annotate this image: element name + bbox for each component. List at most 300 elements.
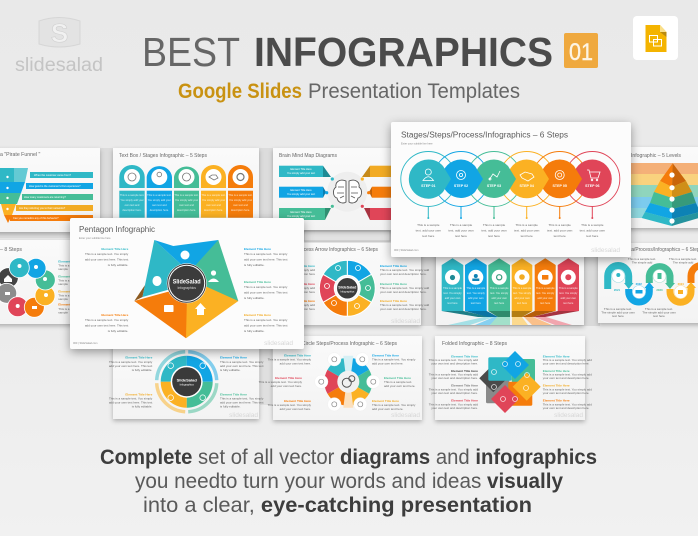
- center label: [177, 378, 197, 386]
- right text: is fully editable.: [244, 296, 265, 300]
- column text: This is a sample text.: [228, 193, 253, 197]
- pentagon center: [167, 263, 207, 303]
- right text: Element Title Here: [244, 280, 271, 284]
- column text: text here: [563, 301, 574, 305]
- heading: Stages/Steps/Process/Infographics – 6 Steps: [401, 130, 568, 140]
- right text: This is a sample text. You simply add: [380, 268, 430, 272]
- brand: slidesalad: [591, 247, 620, 254]
- step text: This is a sample: [549, 223, 571, 227]
- logo: slidesalad: [15, 18, 103, 76]
- column text: own text and: [179, 203, 194, 207]
- column text: You simply add your: [202, 198, 225, 202]
- left text: Element Title Here: [125, 356, 153, 360]
- column: yellow: [201, 165, 226, 218]
- column: green: [488, 258, 510, 311]
- step text: text here: [521, 234, 533, 238]
- step text: This is a sample: [483, 223, 505, 227]
- right text: Element Title Here: [380, 299, 407, 303]
- column text: add your own: [561, 296, 577, 300]
- step text: text here: [586, 234, 599, 238]
- right text: your own text and description here.: [543, 391, 590, 395]
- left text: This is a sample text. You simply: [259, 380, 302, 384]
- column text: own text and: [125, 203, 140, 207]
- snake text: text here: [612, 314, 624, 318]
- left text: Element Title Here: [451, 354, 478, 358]
- left boxes: You simply add your text: [287, 171, 315, 175]
- right text: Element Title Here: [220, 392, 247, 396]
- right text: [244, 247, 288, 333]
- step labels: STEP 02: [454, 184, 468, 188]
- logo: slidesalad: S: [51, 18, 68, 48]
- column text: You simply add your: [148, 198, 171, 202]
- step text: This is a: [58, 307, 70, 311]
- left text: [259, 354, 311, 411]
- step text: text. add your own: [547, 228, 573, 232]
- panel: pyramid slide: [626, 147, 698, 228]
- year labels: [614, 282, 684, 292]
- step icons: [423, 169, 600, 181]
- right text: Element Title Here: [372, 399, 399, 403]
- funnel graphic: [0, 168, 28, 223]
- brand: slidesalad: [554, 412, 583, 419]
- brain circle: [327, 172, 367, 212]
- logo: slidesalad: slidesalad: [15, 55, 103, 76]
- panel: circle quadrant slide: [109, 340, 264, 419]
- right text: your own text and description here.: [543, 362, 590, 366]
- right text: Element Title Here: [372, 354, 399, 358]
- right text: Element Title Here: [380, 264, 407, 268]
- left text: Element Title Here: [275, 376, 302, 380]
- left text: add your own text here.: [271, 384, 302, 388]
- left text: Title Here: [301, 264, 315, 268]
- snake text: The simple add your own: [642, 310, 676, 314]
- subtitle: [178, 80, 520, 103]
- step text: text. add your own: [514, 228, 540, 232]
- connector dots: [325, 177, 370, 208]
- heading: a "Pirate Funnel ": [0, 152, 40, 158]
- column text: This is a sample: [559, 286, 578, 290]
- left text: This is a sample text. You simply: [109, 396, 153, 400]
- center label: Infographics: [180, 382, 194, 386]
- step labels: [421, 184, 599, 188]
- step text: text. add your own: [416, 228, 441, 232]
- column text: You simply add your: [120, 198, 144, 202]
- year labels: 2022: [636, 282, 642, 286]
- right text: This is a sample text. You simply: [244, 285, 288, 289]
- column text: text. You simply: [513, 291, 532, 295]
- subtitle: Presentation Templates: [308, 80, 520, 103]
- column text: own text and: [233, 203, 248, 207]
- column text: You simply add your: [229, 198, 252, 202]
- left text: Element Title Here: [451, 369, 478, 373]
- snake text: The simple add your own: [601, 310, 635, 314]
- step text: sample: [58, 297, 68, 301]
- step text: This is a sample: [516, 223, 538, 227]
- right text: is fully editable.: [244, 263, 265, 267]
- right text: This is a sample text. You simply add: [380, 303, 430, 307]
- right text: add your own text here. This text: [244, 258, 288, 262]
- left text: This is a sample text. You simply: [268, 403, 311, 407]
- main title: BEST: [142, 29, 240, 75]
- left text: Element Title Here: [451, 384, 478, 388]
- left text: Title Here: [301, 282, 315, 286]
- column text: add your own: [468, 296, 484, 300]
- left text: This is a sample text. You simply add: [429, 373, 478, 377]
- step text: text here: [488, 234, 500, 238]
- panel: snake process slide: [598, 243, 698, 323]
- column: blue: [147, 166, 172, 218]
- column text: own text and: [152, 203, 167, 207]
- right text: This is a sample text. You simply add: [543, 402, 592, 406]
- left text: add your own text here. This text: [109, 400, 152, 404]
- column text: add your own: [537, 296, 554, 300]
- right text: add your own text here. This text: [220, 364, 264, 368]
- left boxes: You simply add your text: [287, 192, 315, 196]
- step text: sample: [58, 310, 68, 314]
- left text: This is a sample text. You simply add: [429, 402, 478, 406]
- year labels: 2024: [678, 282, 684, 286]
- step text: This is a sample: [450, 223, 472, 227]
- right text: Element Title Here: [543, 399, 570, 403]
- outer rings: [401, 152, 620, 206]
- snake text: This is a sample text.: [628, 257, 656, 261]
- column text: You simply add your: [175, 198, 198, 202]
- step text: Element T: [58, 259, 73, 263]
- step text: Element T: [58, 289, 73, 293]
- right text: [543, 354, 592, 410]
- step text: text here: [422, 234, 435, 238]
- column text: text. You simply: [559, 291, 578, 295]
- left text: add your own text here. This text: [109, 364, 152, 368]
- column text: own text and: [206, 203, 221, 207]
- column text: description here.: [122, 208, 142, 212]
- step text: This is a: [58, 264, 70, 268]
- badge: 01: 01: [569, 39, 593, 66]
- subtitle: Google Slides: [178, 80, 302, 103]
- brand: slidesalad: [391, 412, 420, 419]
- left text: add your own text here.: [280, 407, 311, 411]
- right text: This is a sample text. You simply add: [380, 286, 430, 290]
- pentagon star: [134, 240, 238, 338]
- right text: This is a sample text. You simply: [244, 318, 288, 322]
- ring icons: [324, 266, 370, 308]
- left text: Element Title Here: [101, 313, 129, 317]
- column text: text here: [447, 301, 458, 305]
- left text: Title Here: [301, 299, 315, 303]
- step labels: STEP 06: [585, 184, 599, 188]
- heading: Infographic – 5 Levels: [631, 153, 681, 159]
- column text: text here: [540, 301, 551, 305]
- left text: This is a sample text. You simply: [109, 360, 153, 364]
- center label: SlideSalad: [177, 378, 197, 382]
- year labels: 2023: [656, 288, 663, 292]
- left text: [429, 354, 478, 410]
- column text: description here.: [231, 208, 250, 212]
- pyramid: [642, 163, 698, 226]
- snake text: This is a sample text.: [604, 307, 632, 311]
- column text: description here.: [150, 208, 169, 212]
- funnel bars: [10, 172, 93, 221]
- right text: Element Title Here: [384, 376, 411, 380]
- right text: Element Title Here: [543, 354, 570, 358]
- left text: You simply add: [295, 286, 315, 290]
- column text: add your own: [514, 296, 530, 300]
- right text: your own text and description here.: [380, 290, 427, 294]
- step text: Element T: [58, 303, 73, 307]
- column: teal: [442, 258, 463, 311]
- left text: [85, 247, 129, 333]
- panel: pirate funnel slide: [0, 148, 100, 232]
- left boxes: Element Title Here: [290, 210, 312, 214]
- left text: Element Title Here: [125, 392, 153, 396]
- panel: stages steps slide: [391, 122, 631, 257]
- column text: text. You simply: [536, 291, 555, 295]
- snake text: This is a sample text.: [669, 257, 697, 261]
- funnel bars: How good is the customer's first experience?: [29, 184, 81, 188]
- right text: is fully editable.: [244, 329, 265, 333]
- left text: description here: [294, 307, 315, 311]
- left text: Element Title Here: [284, 354, 311, 358]
- left text: description here: [294, 272, 315, 276]
- funnel bars: When the customer came from?: [34, 173, 71, 177]
- panel: process arrow slide: [290, 243, 430, 325]
- column text: [120, 193, 253, 212]
- step labels: STEP 03: [487, 184, 501, 188]
- step text: This is a sample: [417, 223, 440, 227]
- step text: [58, 259, 73, 314]
- column text: [443, 286, 578, 305]
- column text: This is a sample: [513, 286, 532, 290]
- right text: Element Title Here: [244, 247, 271, 251]
- step labels: STEP 05: [553, 184, 567, 188]
- left text: [294, 264, 315, 311]
- column text: This is a sample text.: [174, 193, 199, 197]
- panel: 8 steps circle slide: [0, 240, 80, 324]
- left text: add your own text here. This text: [85, 324, 128, 328]
- right text: your own text and description here.: [380, 272, 427, 276]
- left text: [109, 356, 153, 408]
- main title: INFOGRAPHICS: [254, 29, 553, 75]
- right text: This is a sample text. You simply add: [543, 387, 592, 391]
- left text: your own text and description here.: [431, 391, 478, 395]
- column text: add your own: [445, 296, 461, 300]
- snake text: This is a sample text.: [645, 307, 673, 311]
- right text: [372, 354, 416, 411]
- right text: This is a sample text. You simply: [372, 403, 416, 407]
- panel: pentagon infographic slide: [70, 218, 304, 349]
- left boxes: Element Title Here: [290, 188, 312, 192]
- left text: add your own text here.: [280, 362, 311, 366]
- column text: This is a sample: [490, 286, 509, 290]
- brand: slidesalad: [264, 340, 293, 347]
- left text: This is a sample text. You simply add: [429, 387, 478, 391]
- left text: This is a sample text. You simply: [268, 358, 311, 362]
- left text: This is a sample text. You simply: [85, 318, 129, 322]
- right text: This is a sample text. You simply: [244, 252, 288, 256]
- icon: Google Slides: [633, 16, 678, 60]
- column: green: [174, 167, 199, 218]
- column text: This is a sample text.: [147, 193, 172, 197]
- folded diagram: [479, 351, 541, 413]
- left text: your own text and description here.: [431, 406, 478, 410]
- step stems: [427, 207, 593, 219]
- step text: This is a sample: [581, 223, 604, 227]
- column text: description here.: [177, 208, 196, 212]
- column text: This is a sample: [466, 286, 486, 290]
- step text: text here: [554, 234, 566, 238]
- right text: add your own text here.: [384, 384, 416, 388]
- left text: is fully editable.: [132, 404, 152, 408]
- right text: add your own text here. This text: [244, 290, 288, 294]
- column: red: [558, 258, 579, 311]
- step labels: STEP 01: [421, 184, 435, 188]
- right text: add your own text here.: [372, 362, 404, 366]
- snake path: [608, 266, 698, 302]
- step icons: [612, 270, 687, 298]
- right text: [380, 264, 430, 311]
- bottom description: [100, 446, 597, 517]
- right text: Element Title Here: [220, 356, 247, 360]
- right text: This is a sample text. You simply add: [543, 373, 592, 377]
- left text: add your own text here. This text: [85, 258, 128, 262]
- left text: You simply add: [295, 303, 315, 307]
- right text: This is a sample text. You simply: [220, 360, 264, 364]
- column: yellow: [512, 258, 532, 311]
- left text: You simply add: [295, 268, 315, 272]
- circles: [0, 258, 55, 317]
- column text: text. You simply: [490, 291, 509, 295]
- funnel bars: Are they referring you to their networks?: [19, 206, 66, 210]
- step text: text. add your own: [448, 228, 474, 232]
- pentagon center: SlideSalad: [173, 280, 201, 286]
- right text: Element Title Here: [380, 282, 407, 286]
- step text: sample: [58, 282, 68, 286]
- right text: add your own text here.: [372, 407, 404, 411]
- snake text: The simple add: [632, 260, 653, 264]
- right text: your own text and description here.: [380, 307, 427, 311]
- right text: your own text and description here.: [543, 406, 590, 410]
- right text: [220, 356, 264, 408]
- panel: folded infographic slide: [429, 336, 592, 420]
- bottom description: into a clear, eye-catching presentation: [143, 494, 532, 517]
- snake text: [601, 257, 697, 318]
- left text: is fully editable.: [108, 329, 128, 333]
- step text: text here: [455, 234, 467, 238]
- panel: text box stages slide: [113, 148, 259, 228]
- funnel bars: How many customers are returning?: [24, 195, 66, 199]
- bottom description: Complete set of all vector diagrams and infographics: [100, 446, 597, 469]
- column: orange: [228, 165, 253, 218]
- right text: This is a sample text. You simply: [372, 358, 416, 362]
- left text: is fully editable.: [108, 263, 128, 267]
- ring chart: [319, 260, 375, 316]
- step labels: STEP 04: [520, 184, 534, 188]
- heading: Text Box / Stages Infographic – 5 Steps: [119, 153, 207, 159]
- heading: Process Arrow Infographics – 6 Steps: [296, 247, 378, 253]
- heading: Folded Infographic – 8 Steps: [442, 341, 507, 347]
- column text: description here.: [204, 208, 223, 212]
- right text: This is a sample text. You simply: [220, 396, 264, 400]
- column text: text. You simply: [443, 291, 462, 295]
- left text: your own text and description here.: [431, 376, 478, 380]
- step shapes: [409, 159, 612, 199]
- column text: text here: [517, 301, 528, 305]
- right text: is fully editable.: [220, 368, 241, 372]
- right text: Element Title Here: [543, 369, 570, 373]
- heading: Brain Mind Map Diagrams: [279, 153, 337, 159]
- left boxes: You simply add your text: [287, 214, 315, 218]
- subheading: Enter your subtitle line here: [79, 236, 111, 240]
- left text: Element Title Here: [101, 247, 129, 251]
- footer: 000 | SlideSalad.com: [73, 341, 97, 345]
- column text: This is a sample text.: [201, 193, 226, 197]
- column: teal: [119, 165, 145, 218]
- left boxes: Element Title Here: [290, 167, 312, 171]
- pentagon icons: [153, 250, 219, 315]
- radial diagram: [315, 353, 380, 411]
- footer: 000 | SlideSalad.com: [394, 248, 418, 252]
- step text: This is a: [58, 278, 70, 282]
- subheading: Enter your subtitle line here: [401, 142, 433, 146]
- left text: This is a sample text. You simply add: [429, 358, 478, 362]
- left text: This is a sample text. You simply: [85, 252, 129, 256]
- panel: brain mind map slide: [273, 148, 398, 230]
- pentagon center: Infographics: [177, 286, 196, 290]
- fan rays: [442, 311, 579, 325]
- heading: Pentagon Infographic: [79, 225, 155, 234]
- left text: is fully editable.: [132, 368, 152, 372]
- left text: Element Title Here: [284, 399, 311, 403]
- step text: This is a: [58, 294, 70, 298]
- right text: is fully editable.: [220, 404, 241, 408]
- snake text: text here: [653, 314, 665, 318]
- right text: This is a sample text.: [384, 380, 412, 384]
- column text: text here: [494, 301, 505, 305]
- column text: This is a sample text.: [120, 193, 144, 197]
- right boxes: [362, 166, 398, 220]
- right text: your own text and description here.: [543, 376, 590, 380]
- step text: text. add your own: [481, 228, 507, 232]
- left text: Element Title Here: [451, 399, 478, 403]
- ring center label: SlideSalad: [338, 286, 356, 290]
- panel: circle steps slide: [259, 336, 422, 420]
- column text: This is a sample: [443, 286, 462, 290]
- column text: text here: [471, 301, 481, 305]
- heading: – 8 Steps: [0, 247, 22, 253]
- left text: your own text and description here.: [431, 362, 478, 366]
- column text: add your own: [491, 296, 508, 300]
- level bands: [631, 163, 698, 218]
- column: blue: [465, 258, 487, 311]
- year labels: 2021: [614, 288, 621, 292]
- left text: description here: [294, 290, 315, 294]
- column text: This is a sample: [536, 286, 555, 290]
- column: orange: [535, 258, 556, 311]
- right text: Element Title Here: [244, 313, 271, 317]
- step text: Element T: [58, 274, 73, 278]
- right text: This is a sample text. You simply add: [543, 358, 592, 362]
- ring center label: Infographics: [340, 290, 355, 294]
- heading: Circle Steps/Process Infographic – 6 Steps: [302, 341, 397, 347]
- snake arrowheads: [624, 282, 696, 289]
- badge: 01: [564, 33, 598, 68]
- ring center label: [338, 286, 356, 294]
- right text: Element Title Here: [543, 384, 570, 388]
- column text: text. You simply: [467, 291, 486, 295]
- step icons: [4, 264, 48, 309]
- step text: sample: [58, 267, 68, 271]
- panel: six arrow columns slide: [436, 250, 584, 325]
